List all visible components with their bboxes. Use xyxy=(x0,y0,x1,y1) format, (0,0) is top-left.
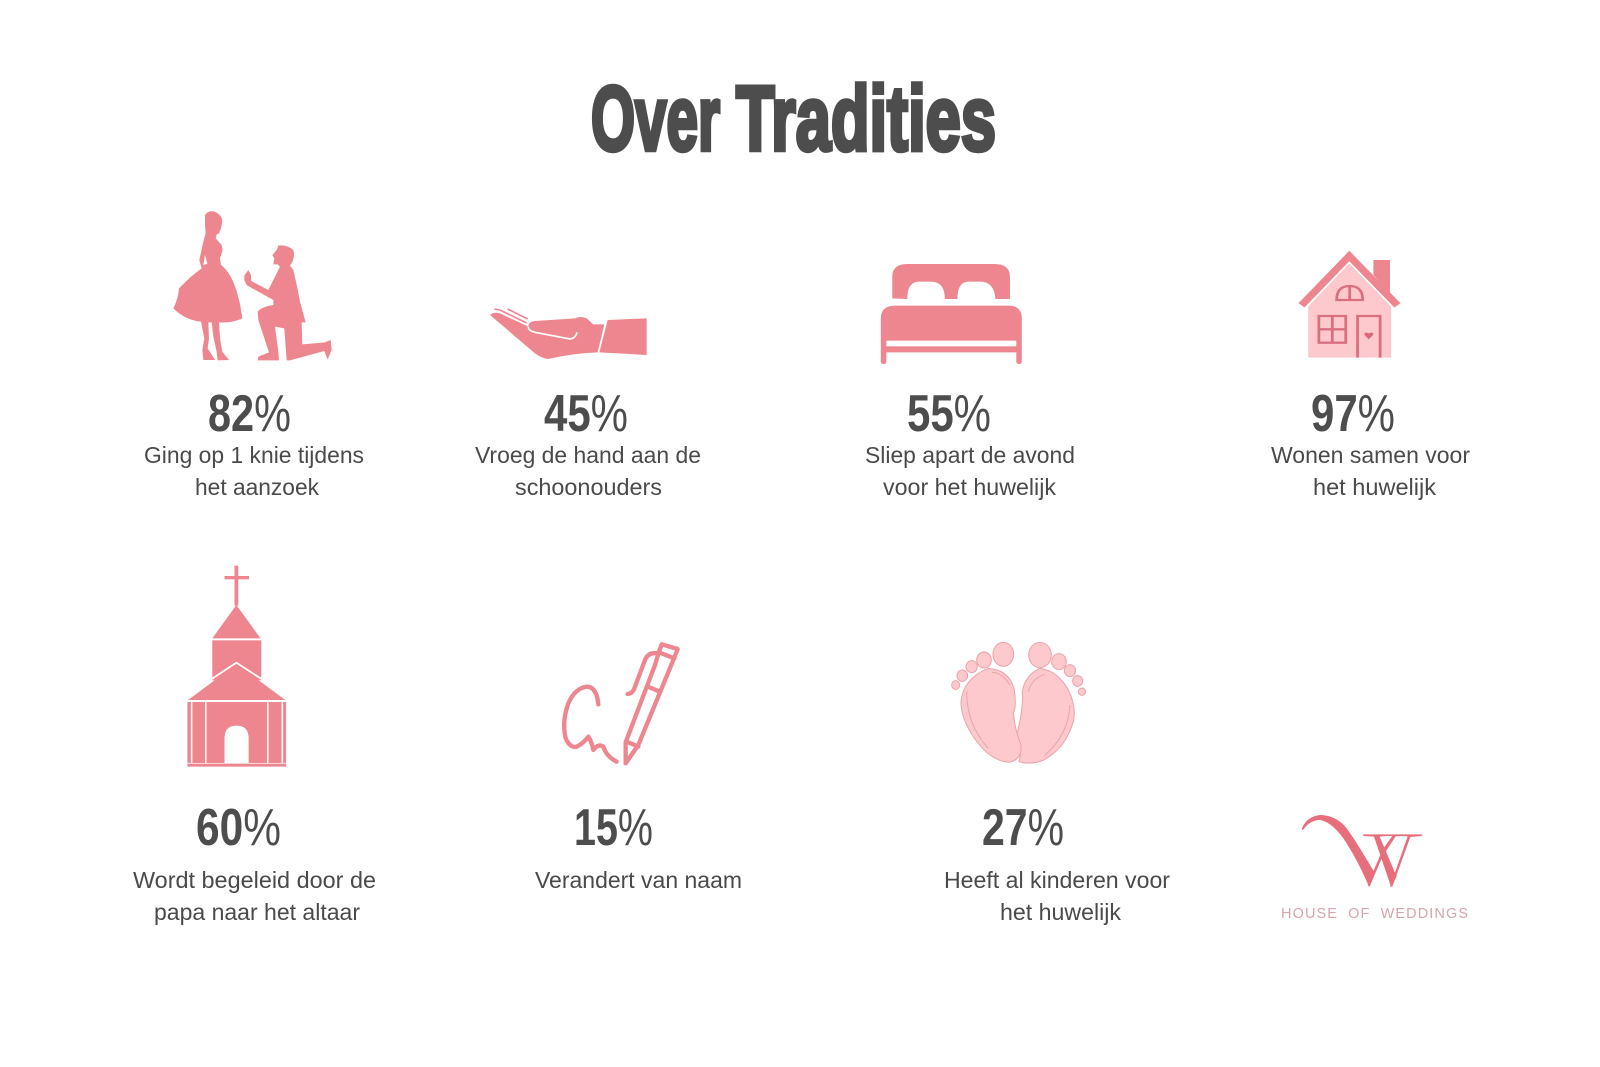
panel: samenwonen xyxy=(1271,256,1470,500)
icon: couple proposing xyxy=(173,211,332,360)
description: apart: voor het huwelijk xyxy=(883,474,1056,500)
title: Tradities xyxy=(736,68,996,170)
icon: house xyxy=(1301,256,1397,358)
panel: hand vragen xyxy=(475,309,701,500)
icon: pen with signature xyxy=(564,644,678,763)
description: knie xyxy=(144,442,364,500)
description: samenwonen: het huwelijk xyxy=(1313,474,1436,500)
description: knie: Ging op 1 knie tijdens xyxy=(144,442,364,468)
percentage: 27%: 27% xyxy=(982,799,1064,857)
description: kinderen xyxy=(944,867,1170,925)
description: hand xyxy=(475,442,701,500)
panel: apart slapen xyxy=(865,264,1075,500)
panel: naam veranderen xyxy=(535,644,742,893)
description: kinderen: het huwelijk xyxy=(1000,899,1121,925)
icon: church xyxy=(187,566,286,767)
description: knie: het aanzoek xyxy=(195,474,319,500)
description: apart xyxy=(865,442,1075,500)
percentage: 97%: 97% xyxy=(1311,385,1395,443)
description: samenwonen xyxy=(1271,442,1470,500)
description: kinderen: Heeft al kinderen voor xyxy=(944,867,1170,893)
percentage: 55%: 55% xyxy=(907,385,991,443)
description: altaar xyxy=(133,867,376,925)
icon: bed xyxy=(881,264,1022,364)
description: hand: Vroeg de hand aan de xyxy=(475,442,701,468)
icon: baby feet xyxy=(952,642,1086,763)
panel: aanzoek op 1 knie xyxy=(144,211,364,500)
description: hand: schoonouders xyxy=(515,474,662,500)
title xyxy=(591,68,996,170)
text: logo wordmark: HOUSE OF WEDDINGS xyxy=(1281,906,1468,922)
description: samenwonen: Wonen samen voor xyxy=(1271,442,1470,468)
description: apart: Sliep apart de avond xyxy=(865,442,1075,468)
icon: W monogram xyxy=(1302,815,1422,887)
title: Over xyxy=(591,68,720,170)
icon: open hand xyxy=(490,309,647,359)
panel: al kinderen xyxy=(944,642,1170,925)
description: naam: Verandert van naam xyxy=(535,867,742,893)
percentage: 45%: 45% xyxy=(544,385,628,443)
description: altaar: Wordt begeleid door de xyxy=(133,867,376,893)
panel: begeleid naar altaar xyxy=(133,566,376,925)
percentage: 82%: 82% xyxy=(208,385,291,443)
logo: House of Weddings xyxy=(1281,815,1468,922)
percentage: 60%: 60% xyxy=(196,799,281,857)
description: altaar: papa naar het altaar xyxy=(154,899,360,925)
percentage: 15%: 15% xyxy=(574,799,653,857)
